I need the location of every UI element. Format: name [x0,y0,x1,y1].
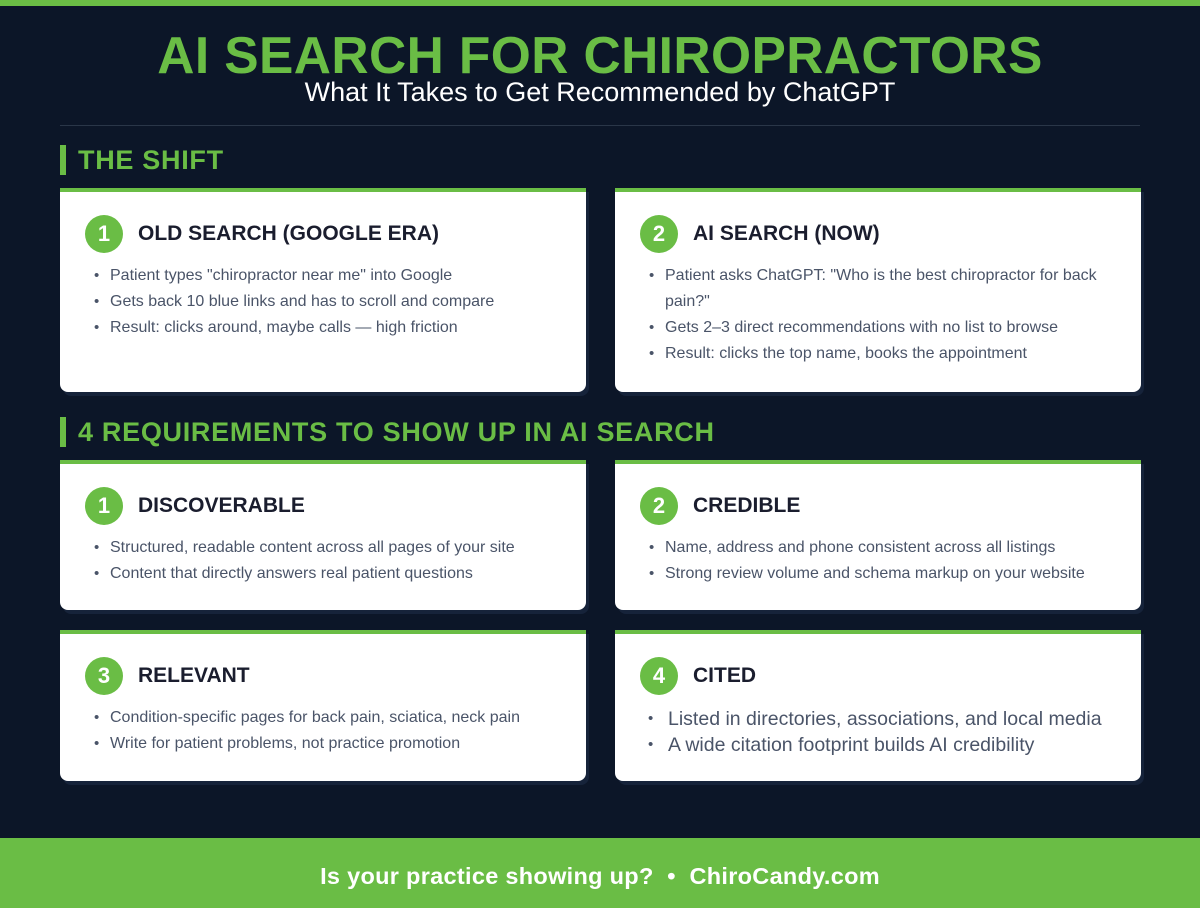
icon: number 1 [85,215,123,253]
panel: credible [615,460,1141,610]
bullets [94,539,515,582]
subtitle: What It Takes to Get Recommended by ChatGPT [305,77,895,107]
bullets [94,267,494,336]
bullets: Result: clicks around, maybe calls — high friction [110,319,458,336]
icon: number 4: 4 [653,663,665,688]
bullets: Condition-specific pages for back pain, sciatica, neck pain [110,709,520,726]
title: AI SEARCH FOR CHIROPRACTORS [157,26,1043,84]
bullets [648,708,1102,756]
bullets: Write for patient problems, not practice promotion [110,735,460,752]
heading: the shift: THE SHIFT [78,145,224,175]
footer callout [0,838,1200,908]
icon: number 3 [85,657,123,695]
panel: discoverable [60,460,586,610]
bullets: Structured, readable content across all pages of your site [110,539,515,556]
card title: AI SEARCH (NOW) [693,222,880,245]
bullets: Patient asks ChatGPT: "Who is the best chiropractor for back pain?" [665,267,1097,310]
icon: number 4 [640,657,678,695]
card title: CREDIBLE [693,494,800,517]
card title: RELEVANT [138,664,250,687]
icon: number 2: 2 [653,493,665,518]
bullets: Patient types "chiropractor near me" into Google [110,267,452,284]
panel: cited [615,630,1141,781]
bullets: Content that directly answers real patient questions [110,565,473,582]
bullets: Listed in directories, associations, and local media [668,708,1102,730]
panel: relevant [60,630,586,781]
card title: DISCOVERABLE [138,494,305,517]
bullets [94,709,520,752]
bullets: Name, address and phone consistent across all listings [665,539,1055,556]
bullets: A wide citation footprint builds AI credibility [668,734,1034,756]
icon: number 1: 1 [98,221,110,246]
bullets: Result: clicks the top name, books the appointment [665,345,1027,362]
bullets: Gets 2–3 direct recommendations with no list to browse [665,319,1058,336]
icon: number 2: 2 [653,221,665,246]
panel: ai search [615,188,1141,392]
card title: CITED [693,664,756,687]
bullets [650,539,1085,582]
icon: number 1 [85,487,123,525]
heading: requirements: 4 REQUIREMENTS TO SHOW UP IN AI SEARCH [78,417,715,447]
icon: number 2 [640,215,678,253]
icon: number 3: 3 [98,663,110,688]
icon: number 1: 1 [98,493,110,518]
card title: OLD SEARCH (GOOGLE ERA) [138,222,439,245]
bullets: Gets back 10 blue links and has to scroll and compare [110,293,494,310]
bullets [650,267,1097,362]
panel: old search [60,188,586,392]
footer callout: Is your practice showing up? • ChiroCandy.com [320,863,880,889]
icon: number 2 [640,487,678,525]
bullets: Strong review volume and schema markup on your website [665,565,1085,582]
